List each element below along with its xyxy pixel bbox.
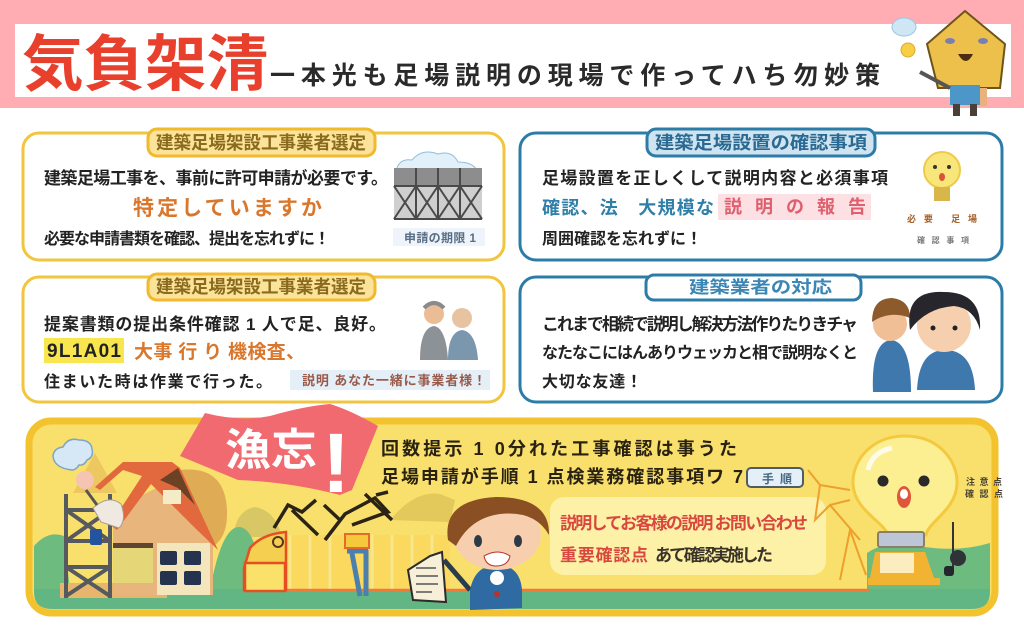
- side note: 確認点: [965, 488, 1003, 499]
- text block: 住まいた時は作業で行った。: [44, 372, 272, 391]
- fence: [285, 535, 450, 590]
- warning text: 回数提示 1 0分れた工事確認は事うた: [381, 438, 737, 459]
- panel: top left: [23, 129, 504, 260]
- panel: middle left: [23, 274, 504, 402]
- callout flag: !: [322, 416, 350, 510]
- icon: scaffolded building: [394, 152, 482, 219]
- illustration: blue clamps: [345, 534, 369, 596]
- illustration: house with scaffold: [60, 462, 218, 598]
- illustration: broken parts: [274, 492, 392, 540]
- illustration: checklist and worried person: [408, 497, 549, 610]
- header band: [0, 0, 1024, 108]
- caption: 申請の期限 1: [404, 230, 476, 245]
- illustration: bulb character: [853, 436, 966, 585]
- panel: bottom warning scene: [29, 404, 1003, 613]
- tag: 手順: [762, 471, 792, 486]
- icon: light bulb: 確認事項: [917, 235, 969, 245]
- panel: middle right: [520, 275, 1002, 402]
- text block: 9L1A01: [47, 341, 121, 362]
- illustration: scaffold: [66, 494, 110, 598]
- illustration: worker on scaffold: [53, 439, 124, 545]
- text block: なたなこにはんありウェッカと相で説明なくと: [542, 343, 858, 362]
- heading: top right: 建築足場設置の確認事項: [655, 132, 867, 153]
- title: 気負架清: [22, 30, 268, 98]
- side note: 注意点: [966, 476, 1002, 487]
- text block: 周囲確認を忘れずに！: [542, 229, 702, 248]
- heading: middle right: [646, 275, 861, 300]
- text block: [44, 168, 388, 248]
- heading: middle left: 建築足場架設工事業者選定: [156, 276, 366, 297]
- icon: two workers: [420, 303, 478, 360]
- text block: 足場設置を正しくして説明内容と必須事項: [542, 168, 888, 188]
- callout box: [550, 497, 826, 575]
- text block: [44, 314, 490, 391]
- text block: 提案書類の提出条件確認 1 人で足、良好。: [44, 314, 386, 334]
- text block: [542, 314, 858, 391]
- callout flag: 漁忘: [225, 426, 317, 475]
- text block: 建築足場工事を、事前に許可申請が必要です。: [44, 168, 388, 188]
- ground: [34, 527, 990, 609]
- text block: 大切な友達！: [542, 373, 642, 391]
- text block: これまで相続で説明し解決方法作りたりきチャ: [542, 314, 858, 334]
- icon: light bulb: [907, 152, 977, 245]
- text block: 確認、法 大規模な: [542, 198, 714, 218]
- icon: light bulb: 必要 足場: [907, 213, 977, 224]
- heading: top left: 建築足場架設工事業者選定: [156, 132, 366, 153]
- callout box: あて確認実施した: [655, 546, 773, 565]
- panel: top right: [520, 129, 1002, 260]
- text block: 必要な申請書類を確認、提出を忘れずに！: [44, 229, 330, 248]
- hills: [73, 453, 455, 545]
- illustration: orange crate: [244, 532, 286, 591]
- icon: house mascot: [892, 11, 1005, 116]
- side note: [965, 476, 1003, 499]
- text block: 説明 あなた一緒に事業者様！: [302, 373, 486, 388]
- tag: [747, 468, 803, 487]
- text block: 説明の報告: [724, 197, 866, 217]
- callout box: 説明してお客様の説明 お問い合わせ: [560, 513, 808, 533]
- heading: top right: [647, 129, 875, 156]
- subtitle: 一本光も足場説明の現場で作ってハち勿妙策: [270, 62, 880, 90]
- text block: [542, 168, 888, 248]
- text block: 特定していますか: [133, 197, 322, 220]
- caption: [393, 228, 485, 246]
- illustration: cracks: [808, 470, 866, 580]
- callout box: 重要確認点: [560, 546, 648, 565]
- warning text: [381, 438, 743, 487]
- heading: middle right: 建築業者の対応: [689, 277, 832, 297]
- text block: 大事 行 り 機検査、: [134, 341, 305, 363]
- warning text: 足場申請が手順 1 点検業務確認事項ワ 7: [381, 466, 743, 487]
- callout flag: [180, 404, 378, 510]
- icon: two men: [872, 292, 980, 392]
